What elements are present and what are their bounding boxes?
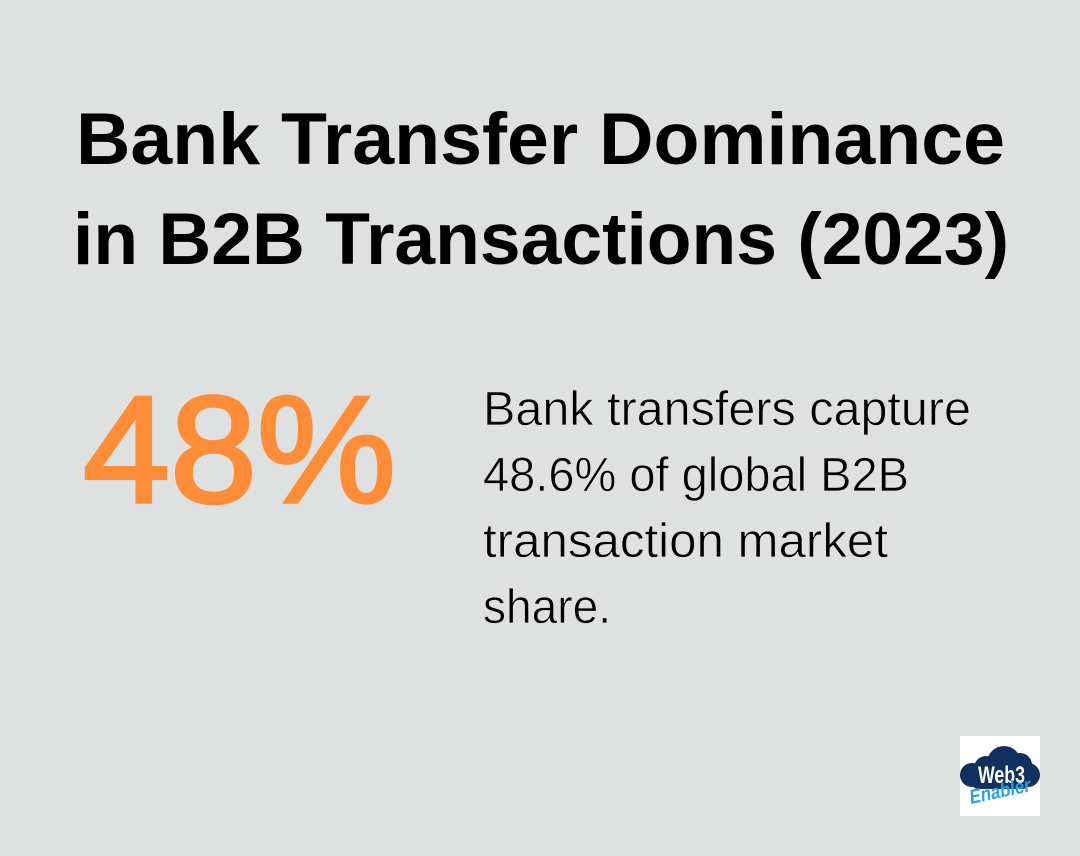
description text: transaction market: [483, 515, 888, 568]
description text: share.: [483, 581, 611, 634]
icon: cloud: [960, 746, 1040, 789]
description text: Bank transfers capture: [483, 383, 971, 436]
logo: Web3 Enabler: [960, 736, 1040, 816]
title: in B2B Transactions (2023): [73, 199, 1009, 280]
description text: 48.6% of global B2B: [483, 449, 909, 502]
title: [73, 99, 1009, 280]
logo script: Enabler: [967, 774, 1034, 809]
title: Bank Transfer Dominance: [76, 99, 1005, 180]
big statistic: 48%: 48%: [83, 365, 396, 535]
description text: [483, 383, 971, 634]
logo wordmark: Web3: [978, 762, 1025, 789]
